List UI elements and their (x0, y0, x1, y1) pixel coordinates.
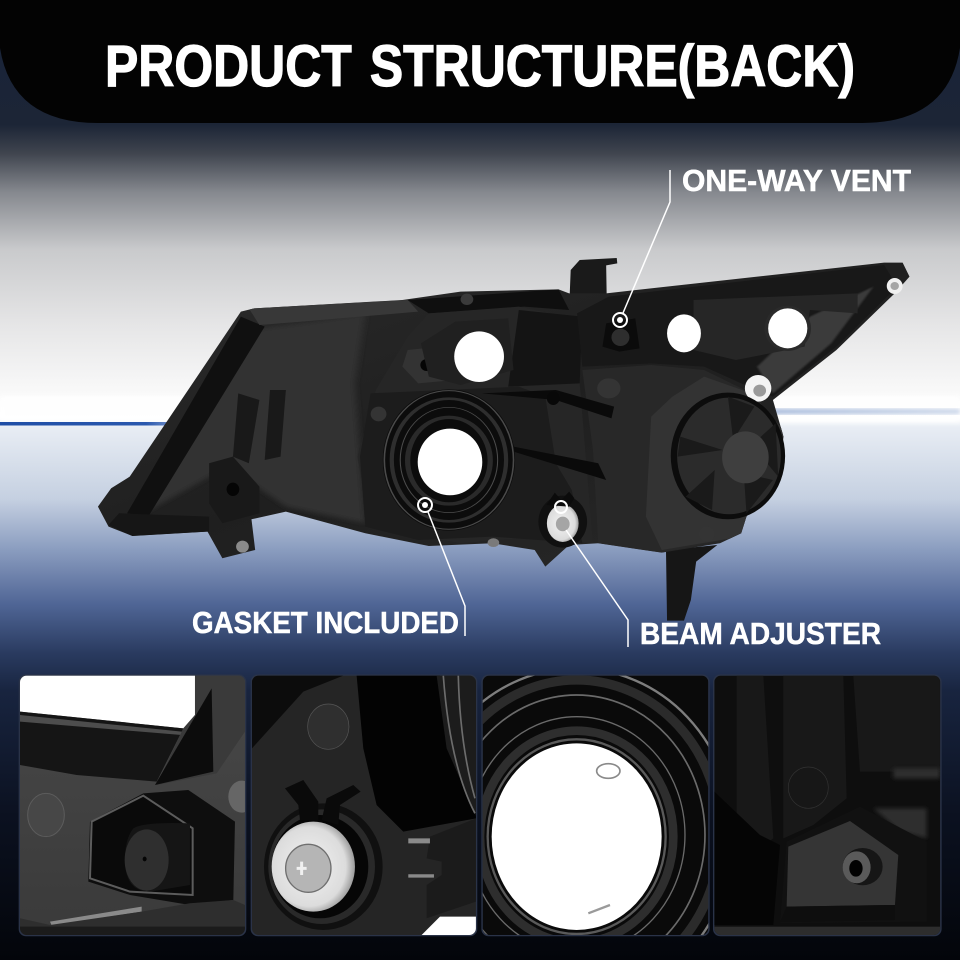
detail panel 2: beam adjuster close-up (251, 674, 477, 936)
detail panel 3: gasket and lens close-up (481, 674, 710, 936)
right housing block (582, 365, 784, 553)
label: beam adjuster: BEAM ADJUSTER (640, 617, 881, 651)
gusset (155, 688, 213, 785)
right clips (427, 818, 476, 918)
leader line: beam adjuster (555, 501, 628, 647)
white background corner (20, 676, 195, 728)
leader line: gasket (418, 498, 465, 636)
corner fasteners (227, 278, 903, 553)
upper right section (577, 265, 897, 397)
adjustment stem (666, 545, 717, 621)
bulb opening 2 (667, 314, 701, 352)
nozzle (843, 848, 883, 885)
leader line: one-way vent (613, 170, 670, 327)
horizon light streak (0, 396, 960, 426)
adjuster ring (264, 803, 383, 930)
label: gasket included: GASKET INCLUDED (192, 606, 459, 640)
white adjuster wheel (272, 822, 355, 912)
housing body (98, 263, 910, 567)
mounting hook (570, 258, 617, 297)
bulb opening 3 (764, 306, 811, 351)
headlight assembly, back view (98, 258, 910, 621)
left wing shading (138, 313, 365, 523)
hex bolt (286, 844, 331, 892)
moulding circle (308, 704, 349, 749)
white corner (422, 917, 476, 935)
dome dust cap (671, 393, 785, 519)
bulb opening 1 (454, 331, 504, 382)
lower ribs (514, 447, 606, 480)
gasket and projector lens (383, 389, 515, 531)
nozzle shroud (887, 821, 916, 836)
clip tabs (285, 780, 318, 820)
moulding circles (28, 793, 64, 837)
title text: PRODUCT STRUCTURE(BACK) (105, 34, 855, 99)
dark upper band (20, 712, 183, 782)
moulding circles (370, 378, 620, 422)
central panel (451, 306, 520, 312)
detail panel 1: vent close-up (19, 674, 255, 937)
bulb holder dark collar (421, 318, 514, 385)
vent cap (125, 823, 190, 892)
vertical shading bands (737, 676, 940, 840)
label: one-way vent: ONE-WAY VENT (682, 164, 911, 198)
beam adjuster knob (538, 492, 587, 548)
wing ribs (209, 390, 286, 492)
one-way vent housing (602, 318, 640, 352)
moulding circle (788, 767, 828, 808)
detail panel 4: rear vent close-up (713, 674, 942, 937)
title banner (0, 0, 960, 123)
hexagon shroud (88, 790, 235, 905)
lens white opening (492, 743, 662, 930)
